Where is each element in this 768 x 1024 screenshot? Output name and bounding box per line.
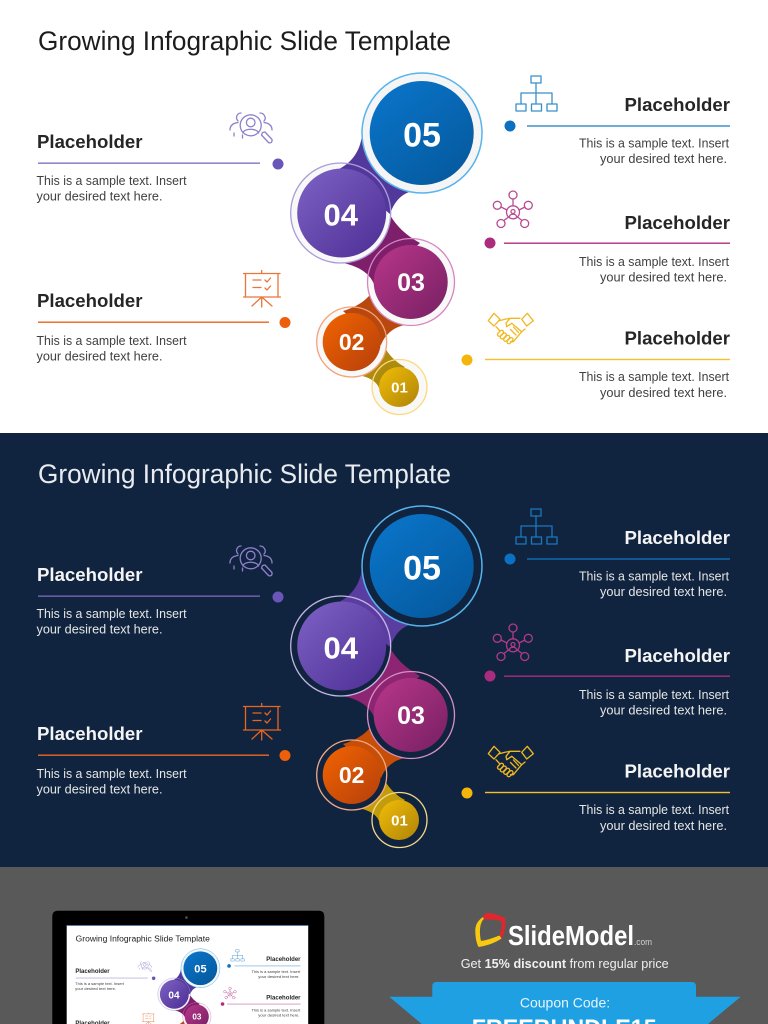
item: right middle: This is a sample text. Insert [579, 688, 730, 702]
logo: SlideModel: SlideModel [508, 920, 634, 951]
growing circles diagram: 02 [339, 762, 364, 788]
item: right top: Placeholder [624, 94, 730, 115]
item: left top: This is a sample text. Insert [36, 607, 187, 621]
item: right top: Placeholder [624, 527, 730, 548]
item: right middle: Placeholder [624, 645, 730, 666]
item: right middle [484, 191, 730, 284]
item: left top: Placeholder [37, 564, 142, 585]
item: right middle: your desired text here. [600, 704, 727, 718]
item: right bottom [462, 746, 730, 833]
coupon ribbon [389, 982, 741, 1024]
item: left bottom: Placeholder [37, 723, 142, 744]
growing circles diagram: 02 [339, 329, 364, 355]
item: right top [504, 76, 730, 166]
growing circles diagram [291, 506, 482, 848]
panel: dark slide background [0, 433, 768, 867]
item: left bottom [36, 270, 290, 364]
item: right bottom [462, 313, 730, 400]
growing circles diagram: 04 [323, 631, 359, 666]
growing circles diagram: 01 [391, 812, 408, 830]
item: right bottom: your desired text here. [600, 386, 727, 400]
item: right bottom: Placeholder [624, 328, 730, 348]
item: right bottom: This is a sample text. Insert [579, 803, 730, 817]
item: right bottom: Placeholder [624, 760, 730, 782]
item: left bottom: your desired text here. [36, 782, 162, 796]
item: right top: This is a sample text. Insert [579, 570, 730, 584]
item: left top [36, 113, 284, 204]
item: right top: This is a sample text. Insert [579, 136, 730, 150]
title: Growing Infographic Slide Template [38, 26, 451, 56]
panel: light background [0, 0, 768, 433]
item: right middle: your desired text here. [600, 270, 727, 284]
coupon ribbon: Coupon Code: [520, 995, 610, 1011]
item: right top: your desired text here. [600, 152, 727, 166]
laptop mockup [52, 911, 324, 1024]
item: left bottom: your desired text here. [36, 350, 162, 364]
item: left bottom: This is a sample text. Insert [36, 767, 187, 781]
growing circles diagram: 01 [391, 380, 408, 396]
panel: light slide [36, 26, 730, 414]
item: left top: Placeholder [37, 131, 142, 152]
item: right middle: This is a sample text. Insert [579, 255, 730, 269]
discount text: Get 15% discount from regular price [461, 956, 669, 971]
title: Growing Infographic Slide Template [38, 459, 451, 489]
logo: SlideModel [475, 913, 652, 951]
growing circles diagram [291, 73, 482, 414]
item: left bottom [36, 704, 290, 796]
item: left bottom: This is a sample text. Insert [36, 334, 187, 348]
item: left top: your desired text here. [36, 622, 162, 636]
item: left bottom: Placeholder [37, 290, 142, 311]
item: right bottom: your desired text here. [600, 819, 727, 833]
growing circles diagram: 05 [403, 116, 441, 154]
item: right bottom: This is a sample text. Insert [579, 370, 730, 384]
growing circles diagram: 04 [323, 198, 359, 233]
item: right middle [484, 624, 730, 718]
panel: dark slide [36, 459, 730, 848]
item: right top [504, 509, 730, 599]
item: left top: your desired text here. [36, 190, 162, 204]
item: right middle: Placeholder [624, 212, 730, 233]
item: right top: your desired text here. [600, 585, 727, 599]
item: left top: This is a sample text. Insert [36, 174, 187, 188]
growing circles diagram: 05 [403, 550, 441, 588]
logo: SlideModel: .com [634, 937, 652, 947]
panel: promo background [0, 867, 768, 1024]
item: left top [36, 546, 284, 636]
growing circles diagram: 03 [397, 702, 425, 730]
growing circles diagram: 03 [397, 269, 425, 297]
